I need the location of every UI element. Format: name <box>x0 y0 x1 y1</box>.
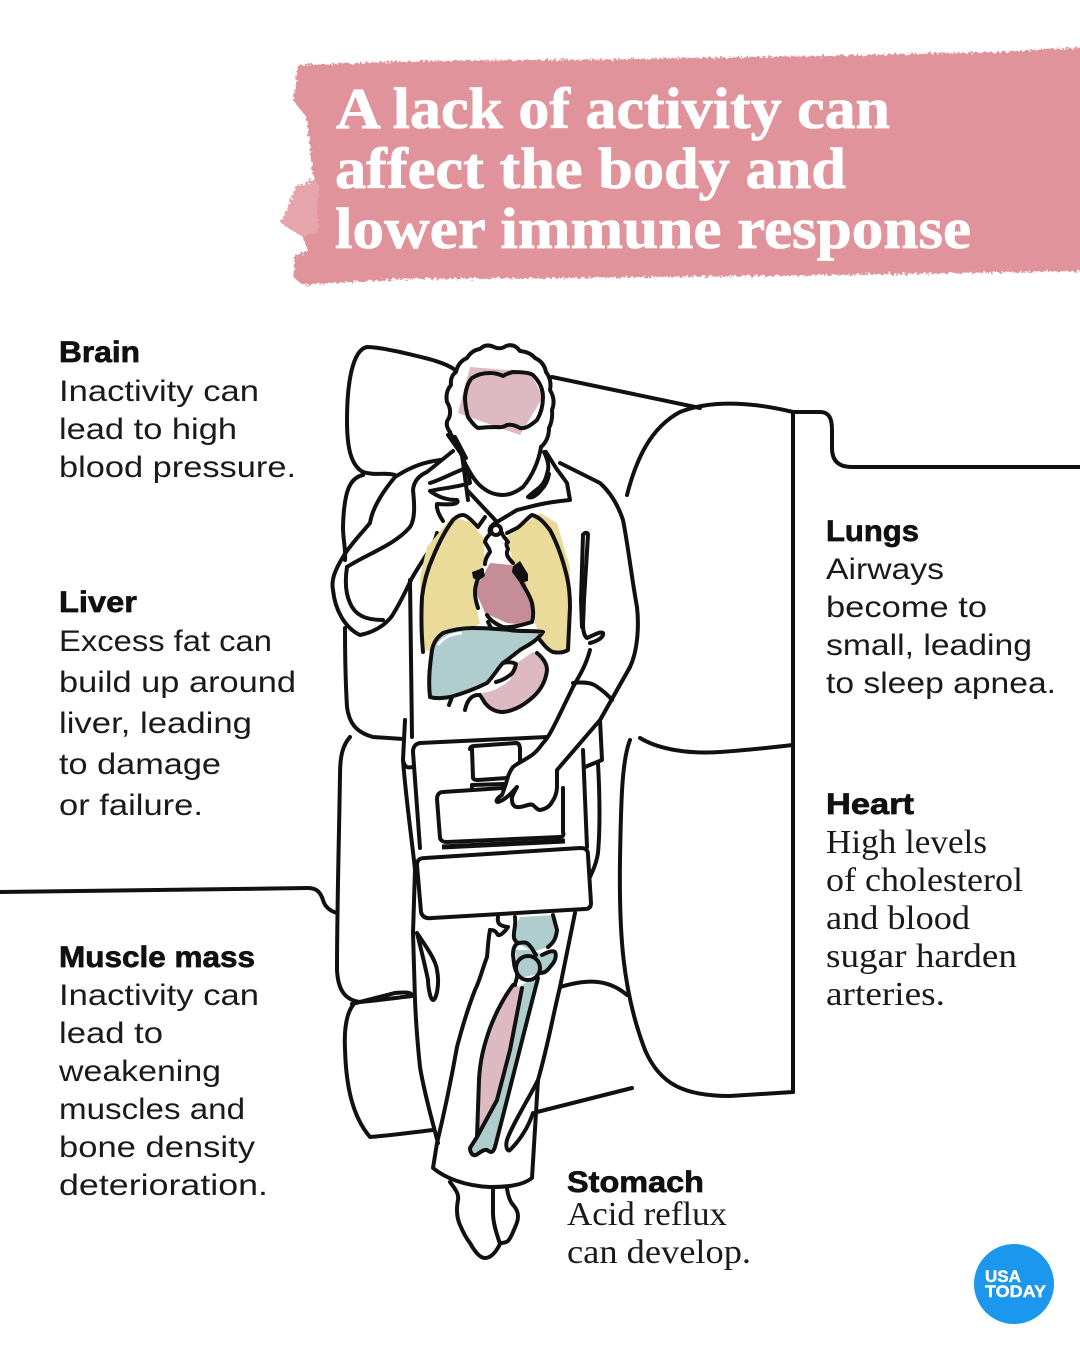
text: muscle mass: weakening <box>58 1055 221 1088</box>
text: liver: liver, leading <box>59 707 252 740</box>
text: lungs: become to <box>826 591 987 624</box>
text: stomach: Acid reflux <box>567 1196 727 1233</box>
text: muscle mass: Inactivity can <box>59 979 259 1012</box>
tibia <box>470 975 538 1155</box>
text: lungs: Lungs <box>826 515 919 548</box>
arm holding phone <box>332 435 470 635</box>
leg bones and muscle <box>470 915 557 1155</box>
forearm and hand <box>497 667 630 810</box>
title: lower immune response <box>335 196 971 261</box>
kneecap <box>516 956 540 980</box>
text: muscle mass: Muscle mass <box>59 941 255 974</box>
text: liver <box>59 586 296 822</box>
text: brain: lead to high <box>59 413 237 446</box>
text: muscle mass: bone density <box>59 1131 255 1164</box>
text: stomach: Stomach <box>567 1166 704 1199</box>
text: liver: Excess fat can <box>59 625 272 658</box>
laptop outer case <box>413 737 547 848</box>
logo: USA TODAY: TODAY <box>985 1282 1047 1301</box>
heart <box>472 561 533 628</box>
text: liver: Liver <box>59 586 137 619</box>
text: heart: of cholesterol <box>826 862 1023 899</box>
text: muscle mass: lead to <box>59 1017 163 1050</box>
text: heart: Heart <box>826 788 914 821</box>
legs <box>413 763 600 1258</box>
feet <box>450 1182 500 1258</box>
callout line: lungs <box>793 412 1080 467</box>
text: muscle mass: muscles and <box>59 1093 245 1126</box>
head <box>446 345 570 522</box>
text: lungs <box>826 515 1056 700</box>
text: brain: Brain <box>59 336 140 369</box>
laptop screen panel <box>470 743 520 780</box>
fingers <box>430 468 470 521</box>
sofa <box>337 347 793 1137</box>
text: muscle mass: deterioration. <box>59 1169 268 1202</box>
phone <box>448 435 468 500</box>
lungs <box>420 513 570 653</box>
text: heart: High levels <box>826 824 987 861</box>
logo: USA TODAY <box>974 1244 1054 1324</box>
title banner <box>281 47 1080 285</box>
logo: USA TODAY: USA <box>985 1267 1021 1286</box>
calf muscle <box>477 985 522 1135</box>
collar <box>528 452 549 497</box>
femur <box>513 915 557 952</box>
title <box>335 76 971 261</box>
text: heart: and blood <box>826 900 970 937</box>
brain fill <box>458 367 543 435</box>
text: liver: build up around <box>59 666 296 699</box>
text: lungs: small, leading <box>826 629 1032 662</box>
text: brain <box>59 336 296 484</box>
text: heart: sugar harden <box>826 938 1017 975</box>
right seam <box>506 1080 538 1151</box>
text: stomach: can develop. <box>567 1234 751 1271</box>
text: lungs: Airways <box>826 553 944 586</box>
text: heart <box>826 788 1023 1013</box>
laptop <box>413 650 630 918</box>
text: heart: arteries. <box>826 976 945 1013</box>
title: affect the body and <box>335 136 846 201</box>
text: stomach <box>567 1166 751 1271</box>
callout line: muscle mass <box>0 888 337 913</box>
brush stroke background <box>281 47 1080 285</box>
pen in pocket <box>583 533 603 643</box>
illustration: person on sofa <box>332 345 793 1258</box>
stomach <box>449 652 548 712</box>
trackpad panel <box>437 788 563 842</box>
hair <box>446 345 554 447</box>
title: A lack of activity can <box>336 76 890 141</box>
brain outline <box>465 372 543 428</box>
pocket slit <box>417 933 438 1000</box>
text: muscle mass <box>58 941 268 1202</box>
shirt cuff <box>573 682 612 700</box>
text: liver: to damage <box>59 748 221 781</box>
text: brain: Inactivity can <box>59 375 259 408</box>
keyboard base <box>417 848 591 918</box>
text: brain: blood pressure. <box>59 451 296 484</box>
torso <box>403 463 638 870</box>
text: lungs: to sleep apnea. <box>826 667 1056 700</box>
face <box>450 433 541 495</box>
liver <box>429 628 543 698</box>
text: liver: or failure. <box>59 789 203 822</box>
